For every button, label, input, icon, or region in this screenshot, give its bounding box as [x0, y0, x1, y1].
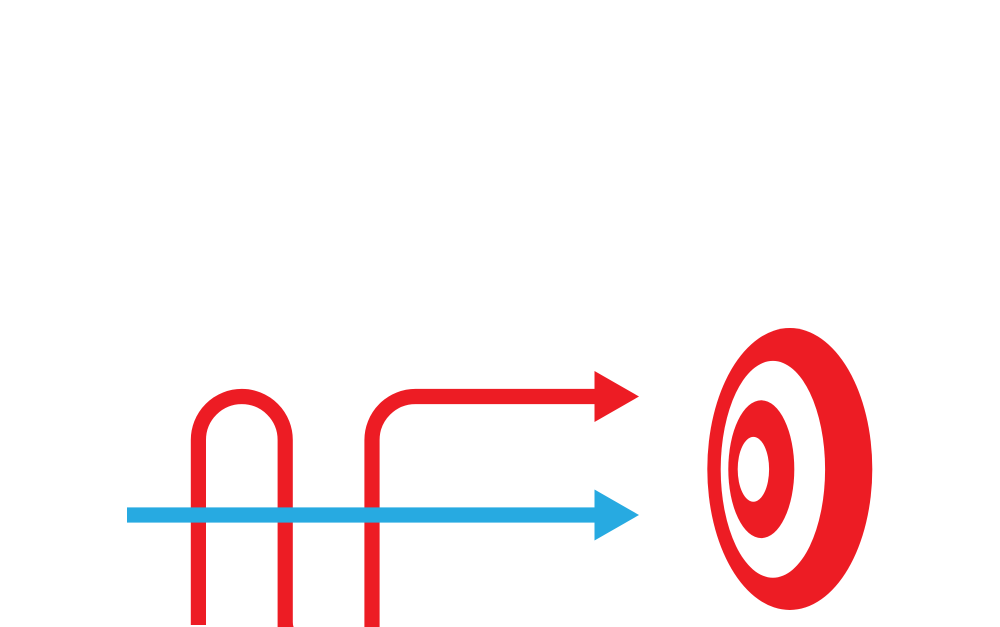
- icon: target: [707, 328, 872, 610]
- red winding arrow: [198, 371, 639, 627]
- blue straight arrow: [127, 490, 639, 540]
